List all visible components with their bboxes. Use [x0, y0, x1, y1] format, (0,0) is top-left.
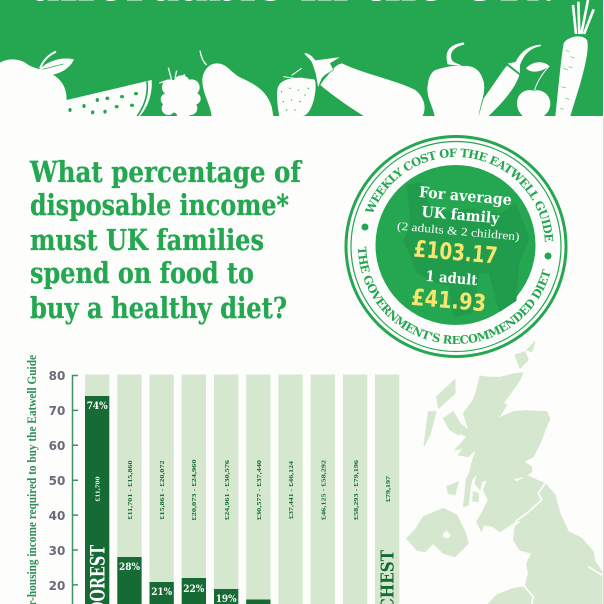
income band labels: £24,961 - £30,576 [225, 460, 231, 520]
icon: raspberry [159, 68, 201, 119]
green header banner [0, 0, 603, 116]
map: UK [407, 342, 602, 604]
icon: pepper [427, 42, 484, 116]
y-axis: 80 [49, 369, 65, 383]
y-axis: 20 [49, 579, 65, 593]
badge text: costs: £41.93 [410, 285, 487, 317]
income band labels: £15,861 - £20,072 [160, 460, 166, 520]
income band labels: £58,293 - £79,196 [354, 460, 360, 520]
heading: question: must UK families [30, 223, 264, 257]
icons: vegetable silhouettes [304, 0, 594, 116]
map: Scottish islands [424, 342, 535, 502]
icon: strawberry [277, 68, 316, 116]
icon: family silhouette [405, 184, 528, 316]
percentage labels: 21% [151, 587, 173, 598]
icon: chilli [479, 44, 541, 116]
income band labels: £11,700 [96, 476, 102, 502]
right page edge [603, 116, 604, 604]
icon: pear [200, 51, 273, 116]
icons: fruit silhouettes [0, 51, 316, 119]
income band labels: £79,197 [386, 476, 392, 502]
icon: cherry [517, 62, 550, 116]
percentage labels: 22% [183, 584, 205, 595]
bar chart: income share by decile [25, 355, 399, 604]
badge text: costs: (2 adults & 2 children) [396, 221, 520, 243]
map: Northern Ireland [407, 508, 468, 557]
income band labels: £11,701 - £15,860 [128, 460, 134, 520]
badge: weekly cost of the Eatwell Guide [344, 135, 568, 358]
heading: question: What percentage of [29, 155, 302, 189]
percentage labels: 28% [119, 562, 140, 573]
income band labels: £30,577 - £37,440 [257, 460, 263, 520]
badge text: costs: 1 adult [425, 268, 478, 289]
icon: apple [0, 52, 74, 116]
bar backgrounds [85, 374, 399, 604]
icon: aubergine [304, 53, 425, 116]
badge text: lower arc: THE GOVERNMENT'S RECOMMENDED DIET [358, 246, 550, 344]
map: internal borders [515, 483, 602, 604]
badge text: costs: For average [418, 183, 513, 209]
badge text: costs: £103.17 [413, 236, 499, 270]
y-axis: 40 [49, 509, 65, 523]
bar values [85, 396, 270, 604]
y-axis: 60 [49, 439, 65, 453]
percentage labels: 74% [87, 401, 108, 412]
income band labels: £46,125 - £58,292 [322, 460, 328, 520]
income band labels: £20,073 - £24,960 [192, 460, 198, 520]
badge text: costs: UK family [421, 203, 501, 227]
y-axis: 30 [49, 544, 65, 558]
y-axis: 70 [49, 404, 65, 418]
badge text: costs [396, 183, 520, 317]
heading: question [29, 155, 302, 325]
heading: question: spend on food to [30, 256, 254, 290]
icon: watermelon [58, 80, 152, 116]
map: Great Britain [455, 373, 602, 604]
badge separator dots [362, 224, 552, 260]
income band labels: £37,441 - £46,124 [289, 461, 295, 519]
percentage labels [87, 401, 237, 604]
heading: question: buy a healthy diet? [30, 291, 287, 325]
income band labels [96, 460, 392, 520]
y-axis [49, 369, 78, 604]
badge text: upper arc: WEEKLY COST OF THE EATWELL GUIDE [364, 148, 554, 242]
icon: carrot [555, 0, 594, 116]
heading: question: disposable income* [30, 188, 289, 222]
y-axis: 50 [49, 474, 65, 488]
